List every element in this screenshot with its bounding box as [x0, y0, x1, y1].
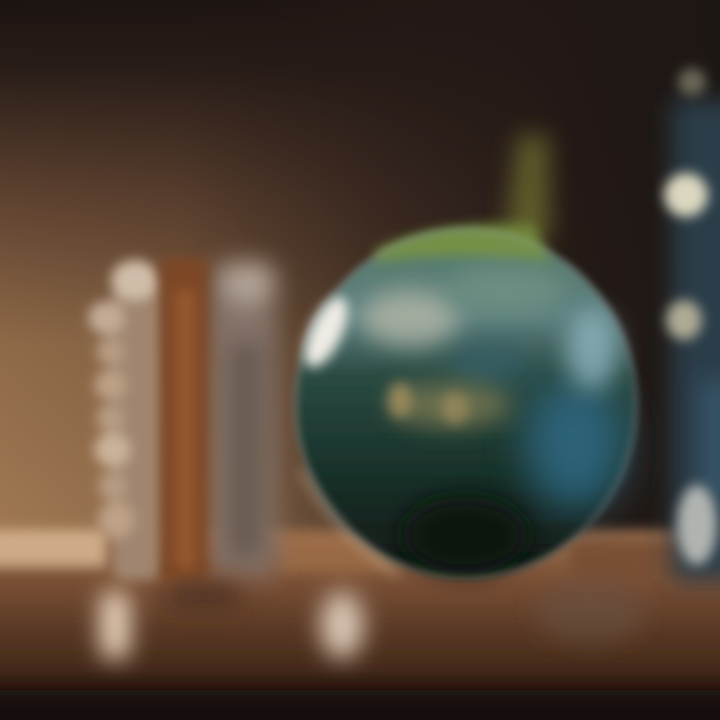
right column [664, 68, 720, 580]
coin stack [88, 258, 276, 580]
globe stem [505, 135, 550, 240]
pale continent [360, 290, 460, 346]
background wall [0, 0, 720, 560]
tan land centre [388, 383, 512, 427]
green top cap [375, 224, 550, 262]
globe [295, 224, 636, 578]
bottom shadow [0, 690, 720, 720]
white highlight [295, 291, 357, 373]
bright spots [678, 68, 706, 96]
table surface [0, 530, 720, 720]
left pale coins [88, 260, 164, 580]
glass stand lines [300, 470, 400, 575]
reflection of coins [100, 582, 645, 660]
centre brown coins [160, 258, 208, 580]
blue ocean right [525, 380, 625, 510]
right grey coins [210, 262, 276, 577]
dark base [403, 497, 527, 573]
rim light [296, 230, 636, 578]
